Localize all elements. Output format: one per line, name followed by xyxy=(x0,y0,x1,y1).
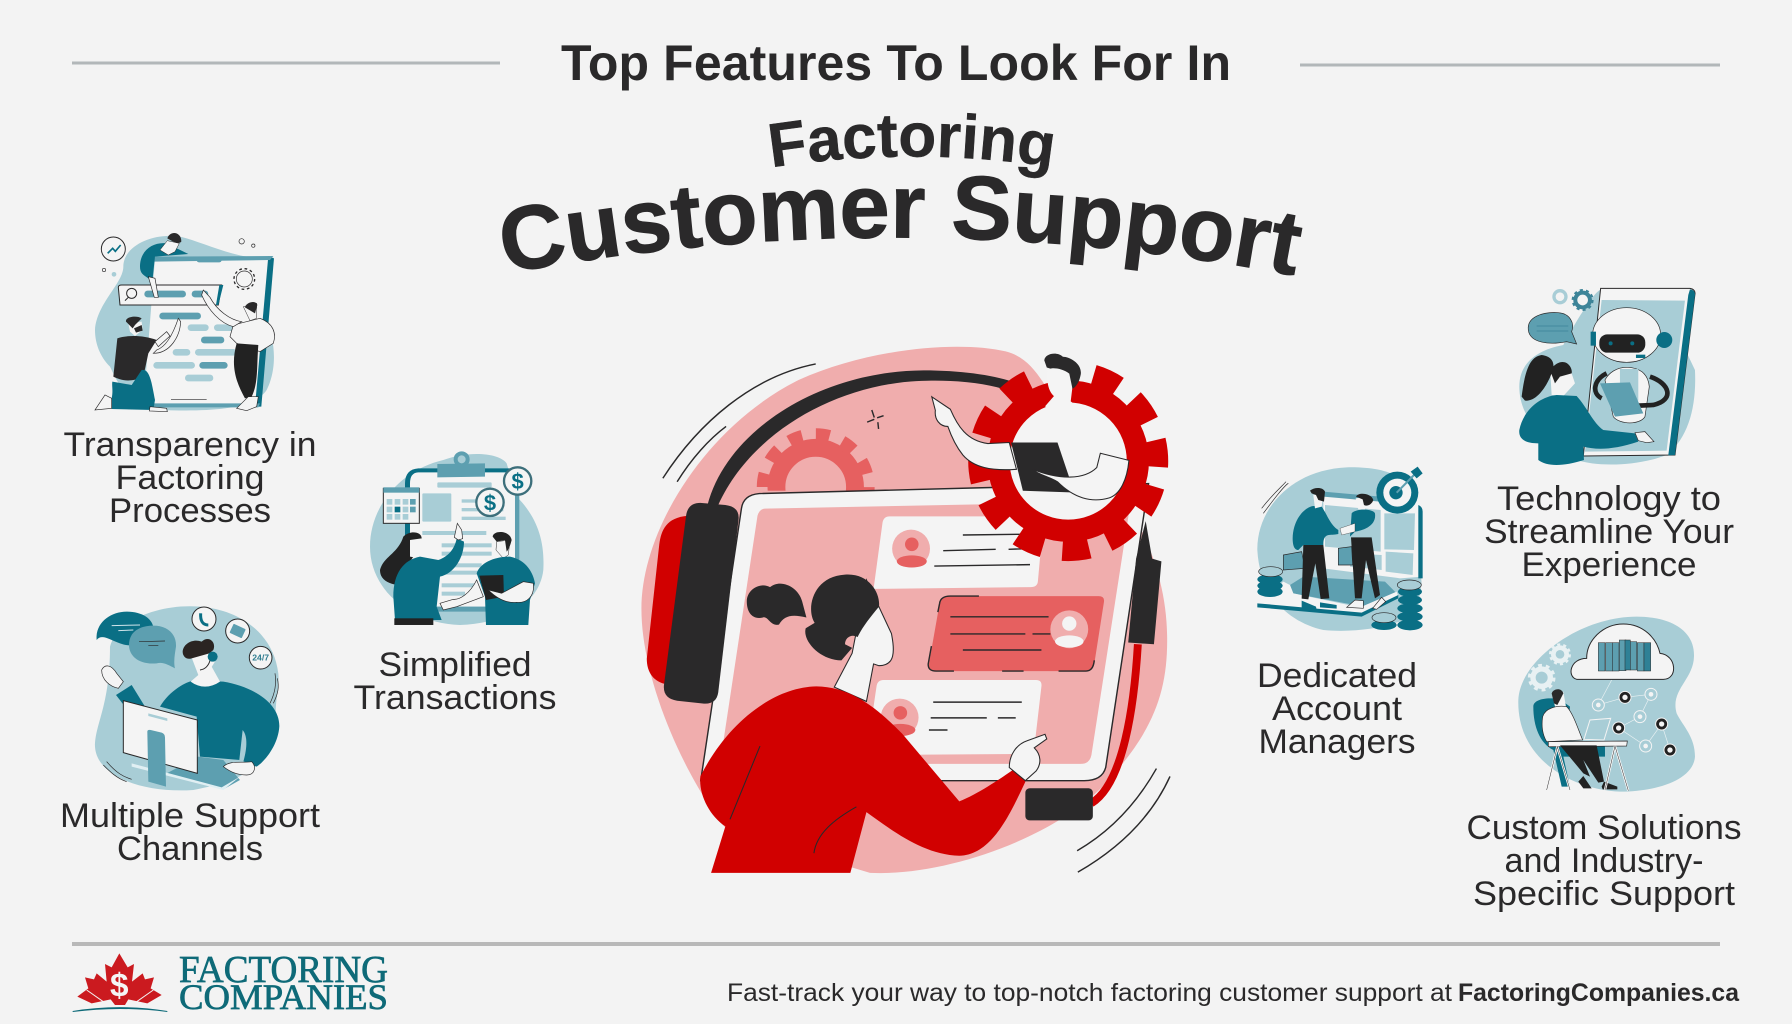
large red gear xyxy=(969,362,1167,560)
pink background blob xyxy=(641,347,1167,873)
label: Simplified Transactions: Simplified xyxy=(378,646,532,684)
label: Dedicated Account Managers: Account xyxy=(1272,690,1403,728)
title line: Factoring: Factoring xyxy=(769,112,1054,178)
man in gear xyxy=(932,354,1129,500)
headset left ear pad xyxy=(647,516,688,684)
logo text: COMPANIES xyxy=(179,977,388,1017)
footer call to action: FactoringCompanies.ca xyxy=(1458,979,1740,1007)
logo icon: maple leaf: $ xyxy=(110,968,129,1005)
icon: transparency in factoring xyxy=(95,233,275,412)
logo: Factoring Companies xyxy=(73,949,388,1017)
label: Transparency in Factoring Processes: Processes xyxy=(109,492,271,530)
label: Dedicated Account Managers: Managers xyxy=(1258,723,1416,761)
icon: multiple support channels xyxy=(95,606,279,790)
logo text xyxy=(179,949,388,1017)
label: Transparency in Factoring Processes: Factoring xyxy=(116,459,264,497)
label: Technology to Streamline Your Experience: Streamline Your xyxy=(1484,513,1734,551)
label: Transparency in Factoring Processes: Transparency in xyxy=(64,426,316,464)
icon: multiple support channels: 24/7 xyxy=(252,653,269,663)
label: Multiple Support Channels: Channels xyxy=(117,830,263,868)
woman with headset xyxy=(700,575,1047,873)
label: Multiple Support Channels xyxy=(60,797,321,868)
icon: custom solutions xyxy=(1518,617,1695,792)
label: Technology to Streamline Your Experience: Technology to xyxy=(1497,480,1721,518)
title line: Top Features To Look For In: Top Features To Look For In xyxy=(561,35,1231,91)
headset left ear cup xyxy=(664,503,739,704)
icon: simplified transactions: $ xyxy=(484,490,496,515)
label: Custom Solutions and Industry-Specific Support xyxy=(1466,809,1742,913)
label: Dedicated Account Managers xyxy=(1257,657,1417,761)
label: Custom Solutions and Industry-Specific Support: and Industry- xyxy=(1504,842,1704,880)
headset microphone xyxy=(1025,788,1093,820)
logo icon: maple leaf xyxy=(73,953,167,1012)
icon: dedicated account managers xyxy=(1257,467,1423,631)
small background gear xyxy=(752,435,881,555)
motion lines xyxy=(663,364,1170,872)
headset band xyxy=(707,370,1013,505)
label: Technology to Streamline Your Experience: Experience xyxy=(1522,546,1696,584)
tablet frame xyxy=(701,484,1149,781)
label: Transparency in Factoring Processes xyxy=(64,426,316,530)
icon: simplified transactions: $ xyxy=(512,469,524,494)
tablet screen xyxy=(720,501,1131,764)
label: Simplified Transactions: Transactions xyxy=(354,679,556,717)
headset microphone cable xyxy=(1091,644,1138,803)
label: Custom Solutions and Industry-Specific Support: Specific Support xyxy=(1473,875,1736,913)
footer call to action: Fast-track your way to top-notch factoring customer support at xyxy=(727,979,1452,1007)
chat card 1 xyxy=(874,516,1043,589)
icon: technology to streamline xyxy=(1519,288,1695,465)
central illustration: customer support xyxy=(641,347,1170,873)
logo text: FACTORING xyxy=(179,949,388,991)
label: Technology to Streamline Your Experience xyxy=(1484,480,1734,584)
label: Dedicated Account Managers: Dedicated xyxy=(1257,657,1417,695)
title xyxy=(502,35,1302,276)
chat card 2 xyxy=(928,596,1104,671)
chat card 3 xyxy=(866,680,1042,755)
label: Multiple Support Channels: Multiple Support xyxy=(60,797,321,835)
title line: Customer Support: Customer Support xyxy=(502,176,1302,276)
label: Custom Solutions and Industry-Specific Support: Custom Solutions xyxy=(1466,809,1742,847)
headset right ear cup xyxy=(1128,521,1161,644)
footer call to action xyxy=(727,979,1740,1007)
label: Simplified Transactions xyxy=(354,646,556,717)
icon: simplified transactions xyxy=(370,453,544,625)
